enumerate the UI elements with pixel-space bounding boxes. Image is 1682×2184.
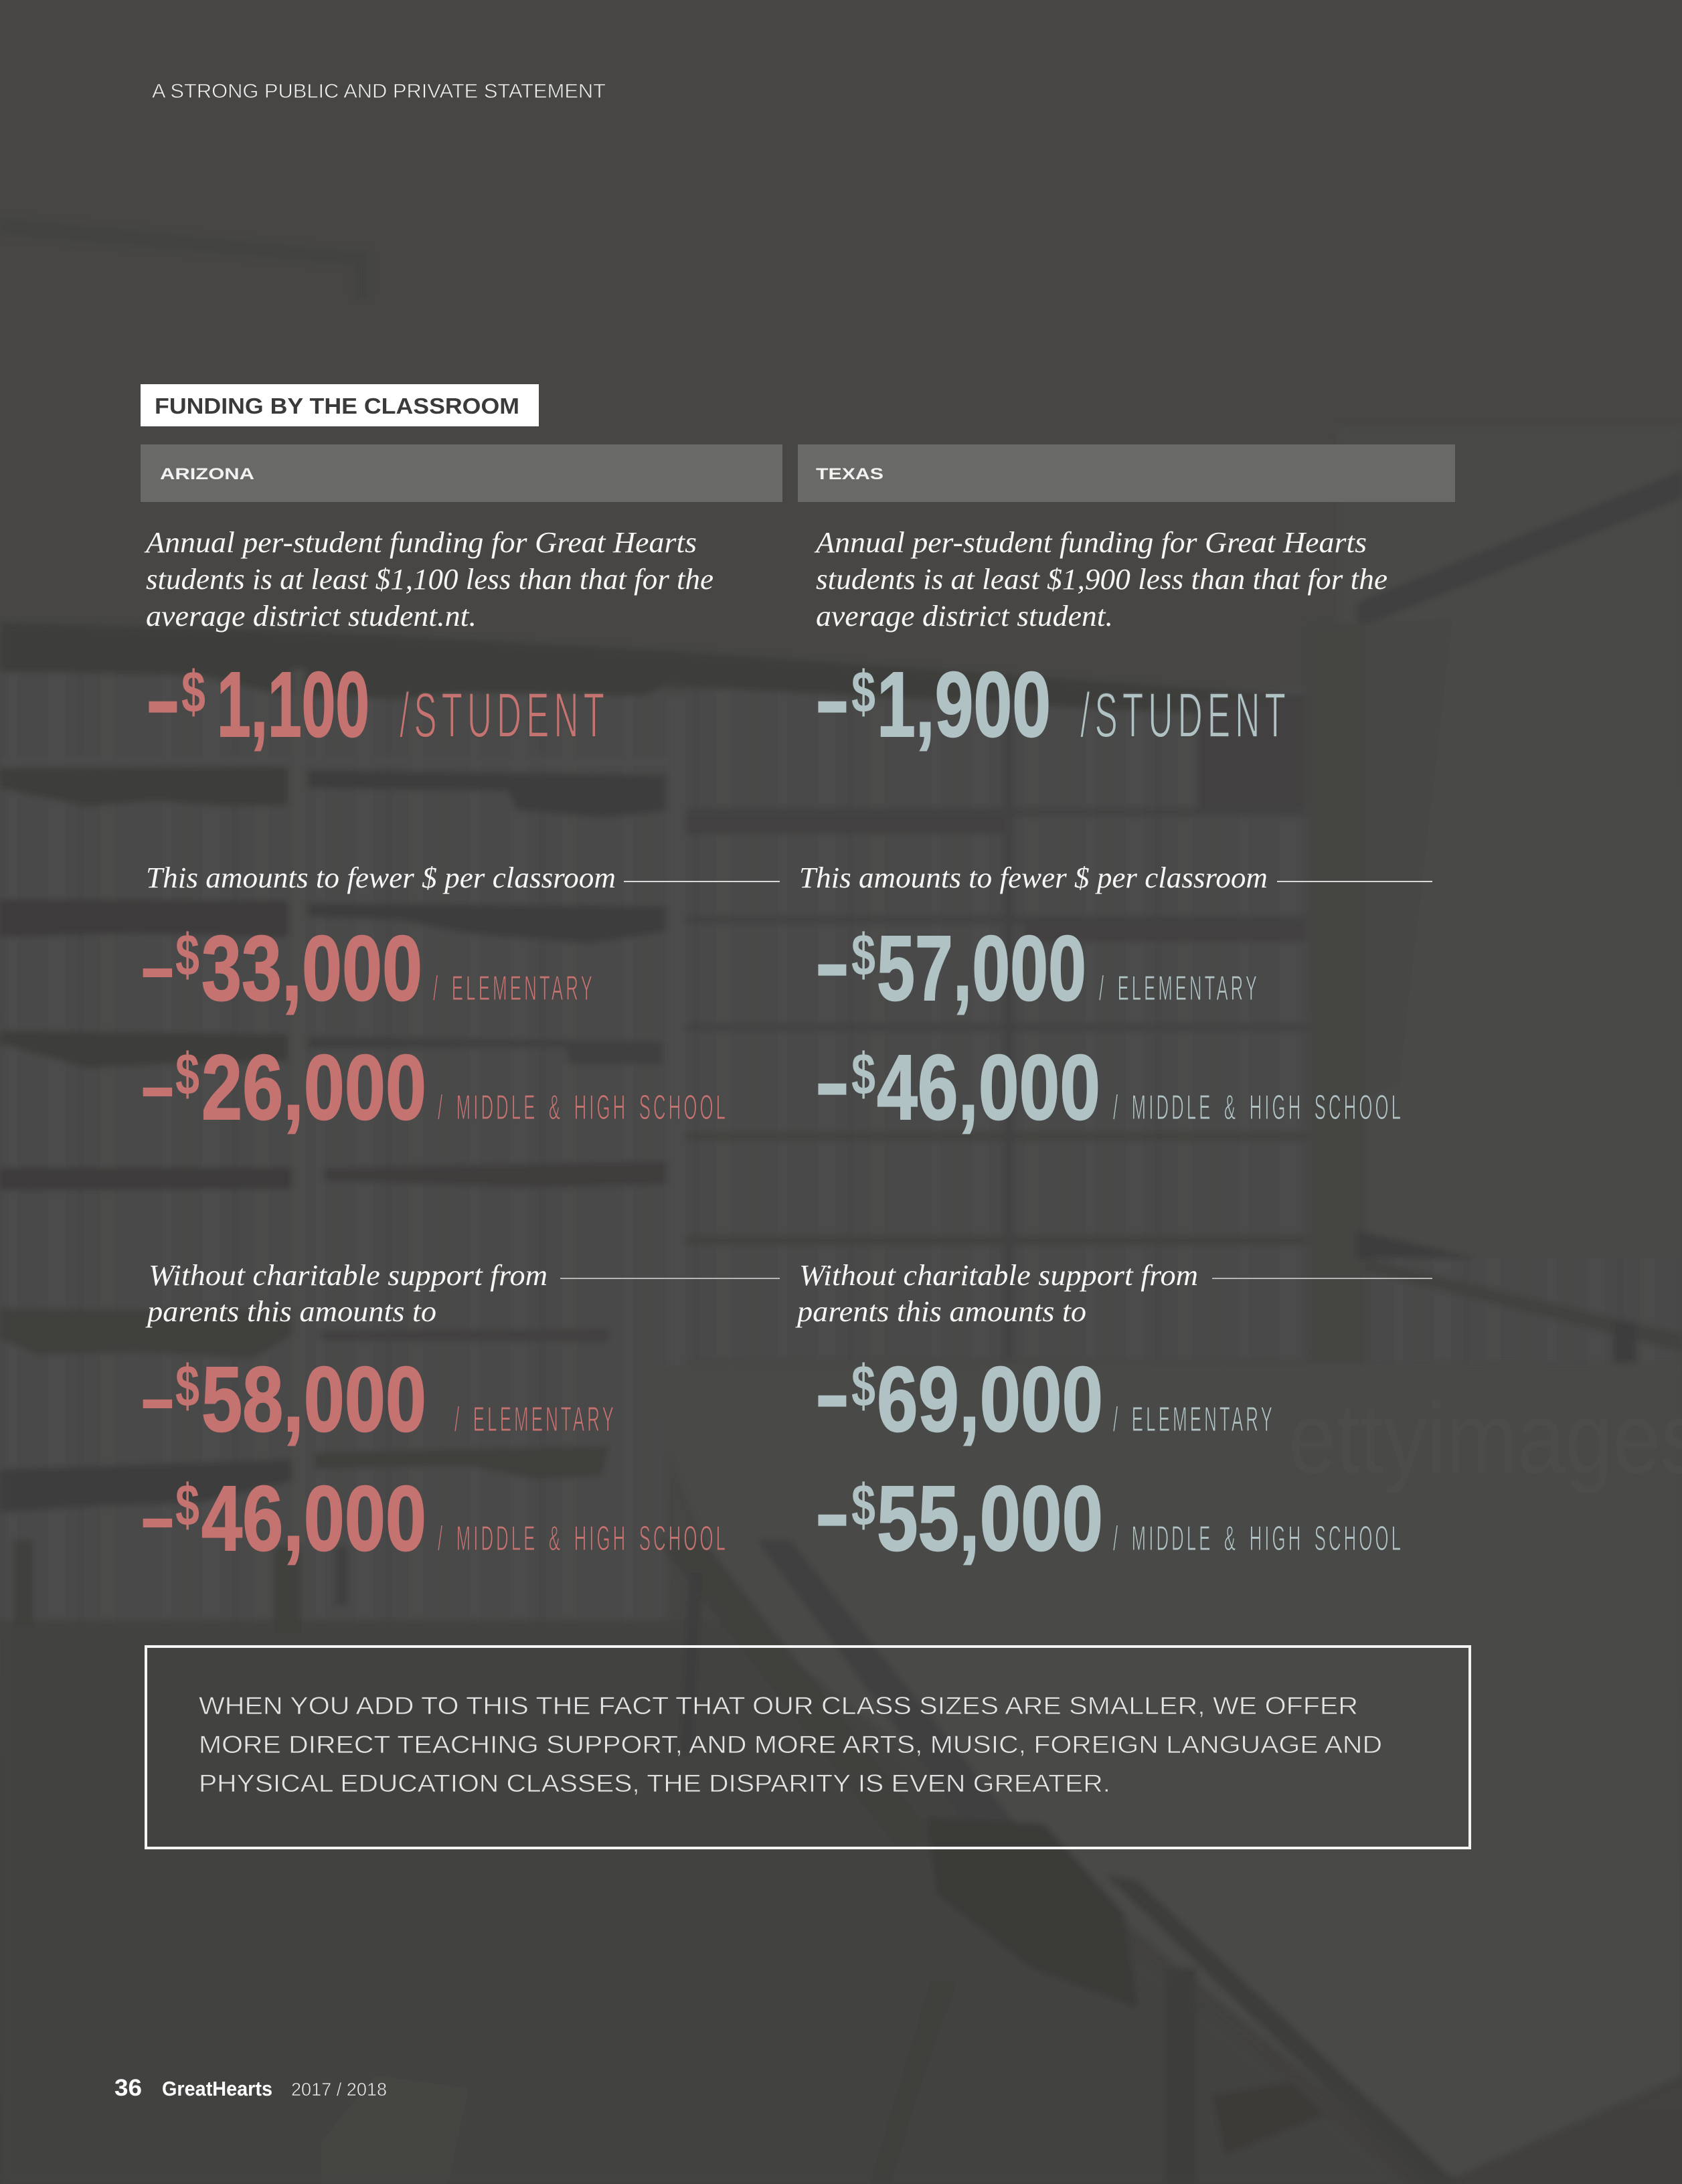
Arizona header bar: ARIZONA [160, 465, 254, 483]
stat: -$46,000 middle and high school: $ [851, 1041, 875, 1107]
stat: -$69,000 elementary [814, 1340, 1275, 1451]
footer: 2017 / 2018 [291, 2079, 387, 2100]
Texas header bar: TEXAS [816, 465, 884, 483]
stat: -$33,000 elementary: - [139, 926, 177, 1008]
stat: -$26,000 middle and high school [139, 1036, 728, 1139]
stat: -$26,000 middle and high school: - [139, 1045, 177, 1127]
panel: Arizona [139, 444, 782, 1570]
Texas intro text: Annual per-student funding for Great Hearts [814, 526, 1367, 559]
stat: -$55,000 middle and high school: $ [851, 1472, 875, 1538]
stat: -$33,000 elementary: 33,000 [201, 917, 422, 1020]
footer: GreatHearts [162, 2077, 272, 2100]
stat: -$57,000 elementary: $ [851, 922, 875, 988]
stat: -$46,000 middle and high school: $ [175, 1472, 199, 1538]
charitable support heading with rule: Without charitable support from [149, 1259, 548, 1292]
stat: -$33,000 elementary: $ [175, 922, 199, 988]
Texas intro text: average district student. [816, 600, 1113, 633]
title: funding by the classroom [141, 384, 539, 426]
stat: -$1,900 per student: 1,900 [877, 653, 1051, 756]
stat: -$46,000 middle and high school: - [139, 1476, 177, 1558]
stat: -$55,000 middle and high school: 55,000 [877, 1467, 1103, 1570]
panel: Arizona: / ELEMENTARY [433, 969, 595, 1008]
stat: -$46,000 middle and high school [139, 1467, 728, 1570]
stat: -$69,000 elementary: $ [851, 1353, 875, 1419]
stat: -$1,100 per student: $ [181, 659, 205, 725]
stat: -$26,000 middle and high school: 26,000 [201, 1036, 426, 1139]
panel: Texas: / ELEMENTARY [1099, 969, 1260, 1008]
callout box: WHEN YOU ADD TO THIS THE FACT THAT OUR CLASS SIZES ARE SMALLER, WE OFFER [199, 1692, 1358, 1719]
classroom heading with rule: This amounts to fewer $ per classroom [799, 861, 1268, 894]
callout box [146, 1647, 1470, 1848]
stat: -$69,000 elementary: - [814, 1340, 851, 1446]
stat: -$46,000 middle and high school: 46,000 [201, 1467, 426, 1570]
callout box: PHYSICAL EDUCATION CLASSES, THE DISPARITY IS EVEN GREATER. [199, 1770, 1110, 1797]
Arizona intro text [144, 526, 713, 633]
stat: -$33,000 elementary [139, 917, 595, 1020]
stat: -$46,000 middle and high school: 46,000 [877, 1036, 1100, 1139]
panel: Texas [795, 444, 1455, 1570]
charitable support heading with rule [145, 1259, 780, 1328]
stat: -$1,100 per student: /STUDENT [400, 680, 609, 751]
panel: Arizona: / ELEMENTARY [454, 1400, 616, 1439]
Arizona intro text: students is at least $1,100 less than that for the [146, 563, 713, 596]
charitable support heading with rule: parents this amounts to [145, 1295, 436, 1328]
stat: -$58,000 elementary: 58,000 [201, 1348, 426, 1451]
panel: Texas: / ELEMENTARY [1113, 1400, 1275, 1439]
footer: 36 [114, 2075, 142, 2101]
callout box: MORE DIRECT TEACHING SUPPORT, AND MORE ARTS, MUSIC, FOREIGN LANGUAGE AND [199, 1731, 1382, 1758]
Texas intro text [814, 526, 1387, 633]
title: funding by the classroom: FUNDING BY THE CLASSROOM [155, 394, 519, 418]
stat: -$57,000 elementary: - [814, 909, 851, 1015]
charitable support heading with rule: parents this amounts to [795, 1295, 1086, 1328]
panel: Arizona: / MIDDLE & HIGH SCHOOL [438, 1088, 728, 1127]
stat: -$46,000 middle and high school [814, 1028, 1404, 1139]
Arizona intro text: average district student.nt. [146, 600, 477, 633]
stat: -$46,000 middle and high school: - [814, 1028, 851, 1135]
stat: -$69,000 elementary: 69,000 [877, 1348, 1103, 1451]
charitable support heading with rule [795, 1259, 1432, 1328]
Texas intro text: students is at least $1,900 less than that for the [816, 563, 1387, 596]
Arizona header bar [141, 444, 782, 502]
stat: -$1,900 per student [814, 646, 1290, 756]
panel: Arizona: / MIDDLE & HIGH SCHOOL [438, 1519, 728, 1558]
section eyebrow: A STRONG PUBLIC AND PRIVATE STATEMENT [152, 80, 606, 102]
stat: -$1,900 per student: /STUDENT [1080, 680, 1290, 751]
classroom heading with rule: This amounts to fewer $ per classroom [146, 861, 616, 894]
Arizona intro text: Annual per-student funding for Great Hearts [144, 526, 697, 559]
stat: -$1,100 per student: 1,100 [217, 653, 369, 756]
stat: -$55,000 middle and high school [814, 1459, 1404, 1570]
stat: -$58,000 elementary: $ [175, 1353, 199, 1419]
stat: -$58,000 elementary [139, 1348, 616, 1451]
stat: -$58,000 elementary: - [139, 1357, 177, 1439]
stat: -$57,000 elementary: 57,000 [877, 917, 1086, 1020]
stat: -$1,900 per student: - [814, 646, 851, 752]
stat: -$55,000 middle and high school: - [814, 1459, 851, 1566]
stat: -$1,100 per student: - [145, 646, 181, 752]
Texas header bar [798, 444, 1455, 502]
footer [114, 2075, 387, 2101]
stat: -$1,900 per student: $ [851, 659, 875, 725]
stat: -$26,000 middle and high school: $ [175, 1041, 199, 1107]
charitable support heading with rule: Without charitable support from [799, 1259, 1198, 1292]
stat: -$1,100 per student [145, 646, 609, 756]
stat: -$57,000 elementary [814, 909, 1260, 1020]
